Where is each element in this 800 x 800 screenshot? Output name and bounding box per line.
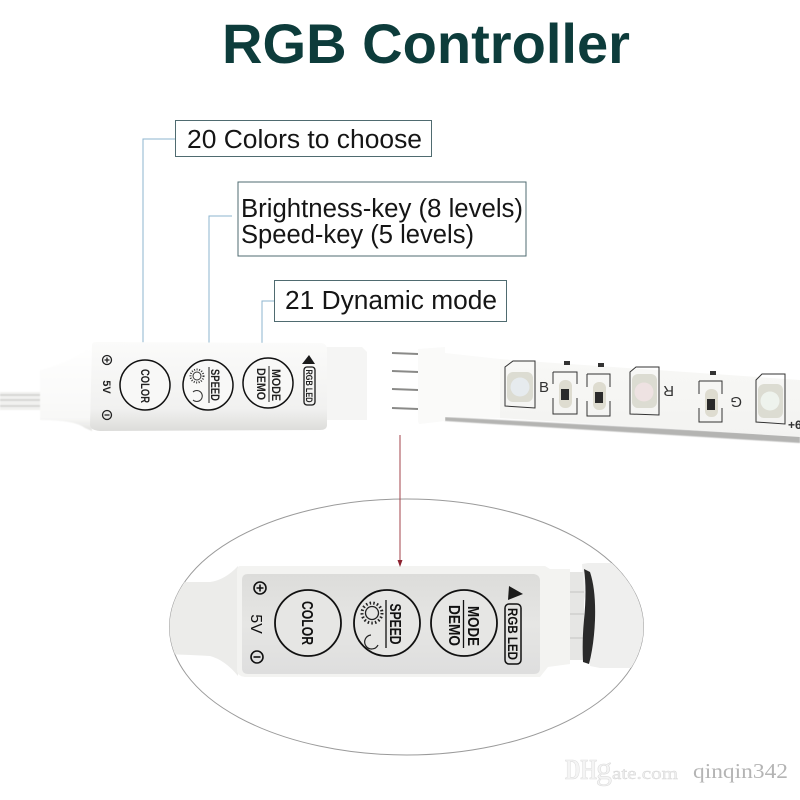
button: color — [120, 360, 170, 410]
button: speed — [183, 360, 233, 410]
controller body — [90, 342, 327, 431]
plus, 5V, minus marks: 5V — [100, 380, 112, 394]
callout: 20 colors to choose: 20 Colors to choose — [187, 126, 422, 154]
strip markings: R — [663, 382, 674, 399]
button: mode demo — [431, 590, 497, 656]
pins — [392, 353, 418, 409]
RGB LED label: RGB LED — [304, 370, 314, 403]
button: speed: SPEED — [386, 604, 403, 644]
connector — [320, 347, 367, 420]
button: mode demo: MODE — [464, 606, 481, 646]
plus, 5V, minus marks — [100, 356, 112, 420]
watermark: g — [596, 750, 612, 786]
button: color — [275, 590, 341, 656]
button: mode demo — [243, 358, 293, 408]
strip shadow — [445, 417, 800, 443]
black connector band — [583, 569, 595, 664]
clear cable — [0, 392, 42, 410]
button: color: COLOR — [138, 369, 150, 404]
watermark — [565, 750, 788, 786]
large RGB controller photo — [165, 563, 660, 677]
zoom ellipse — [170, 499, 644, 755]
strip markings — [539, 361, 800, 432]
resistors — [559, 380, 718, 417]
callout: 21 dynamic mode — [262, 280, 506, 358]
plus, 5V, minus marks — [247, 582, 266, 663]
ribbed connector — [570, 572, 584, 660]
strip markings: B — [539, 379, 549, 396]
watermark: qinqin342 — [693, 759, 788, 783]
title: RGB Controller — [222, 12, 630, 75]
callout: brightness and speed keys: Brightness-key (8 levels) — [241, 195, 523, 223]
face panel — [242, 574, 540, 674]
boot — [40, 344, 92, 431]
arrow: strip connector to zoom — [398, 435, 402, 567]
button: mode demo: DEMO — [254, 368, 266, 400]
button: speed — [354, 590, 420, 656]
button: color: COLOR — [298, 601, 315, 645]
large controller markings — [247, 582, 523, 664]
end cap — [582, 563, 644, 668]
callout: 20 colors to choose — [143, 120, 432, 362]
RGB LED label — [302, 355, 315, 405]
button: mode demo: DEMO — [445, 605, 462, 646]
small RGB controller photo — [0, 342, 367, 431]
callout: brightness and speed keys: Speed-key (5 levels) — [241, 221, 474, 249]
strip markings: G — [730, 393, 742, 410]
button: mode demo: MODE — [269, 369, 281, 401]
LEDs — [505, 361, 785, 424]
cable — [165, 566, 238, 676]
plus, 5V, minus marks: 5V — [247, 614, 264, 634]
callout: brightness and speed keys — [209, 182, 526, 360]
watermark: DH — [565, 754, 597, 786]
RGB LED label: RGB LED — [505, 608, 521, 660]
strip — [498, 359, 800, 437]
callout: 21 dynamic mode: 21 Dynamic mode — [285, 287, 497, 315]
watermark: ate.com — [612, 764, 678, 783]
button: speed: SPEED — [208, 369, 220, 401]
LED strip photo — [392, 347, 800, 443]
collar and body — [237, 566, 570, 677]
plug — [418, 347, 500, 424]
RGB LED label — [505, 586, 523, 664]
